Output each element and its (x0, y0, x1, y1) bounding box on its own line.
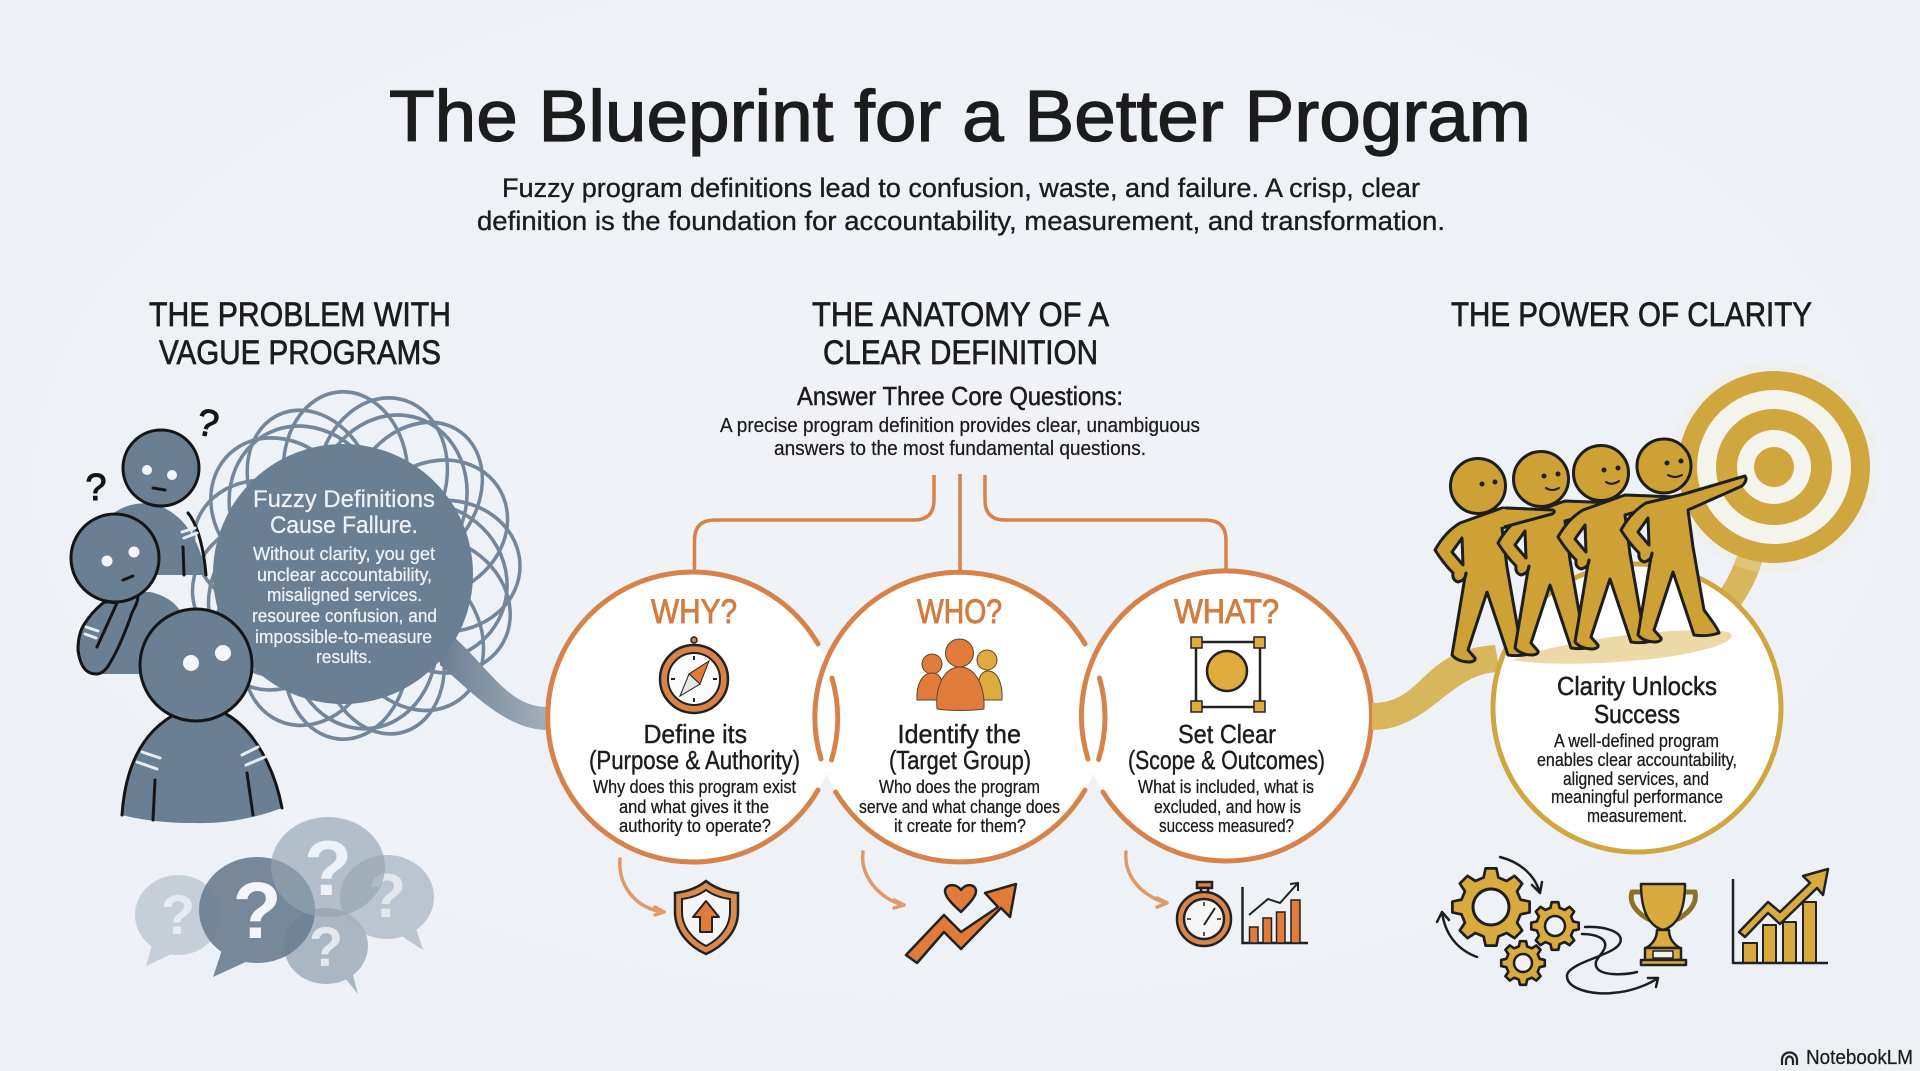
heading: anatomy (812, 296, 1109, 372)
callout: fuzzy definitions: misaligned services. (267, 585, 422, 605)
callout: fuzzy definitions: Without clarity, you get (253, 544, 435, 564)
card: clarity unlocks success: enables clear accountability, (1537, 749, 1737, 770)
callout: fuzzy definitions (213, 444, 473, 704)
icon: person, thinking: ? (85, 467, 107, 509)
icon: question speech bubbles: ? (233, 866, 281, 955)
icon: person, thinking (71, 467, 182, 674)
icon: trophy (1631, 884, 1695, 965)
card: why: Why does this program exist (593, 776, 796, 797)
card: clarity unlocks success: measurement. (1587, 805, 1687, 826)
card: what: excluded, and how is (1154, 796, 1301, 817)
card: clarity unlocks success: Success (1594, 699, 1680, 729)
card: why: WHY? (651, 593, 737, 631)
connector lines (694, 474, 1226, 570)
heading: anatomy: CLEAR DEFINITION (823, 334, 1098, 372)
icon: person, back: ? (193, 401, 222, 447)
card: what: (Scope & Outcomes) (1128, 745, 1325, 775)
subtitle (477, 173, 1445, 236)
callout: fuzzy definitions: Cause Fallure. (270, 512, 418, 539)
grey connector to definition (440, 625, 548, 730)
card: who: (Target Group) (889, 745, 1031, 775)
card: why: (Purpose & Authority) (589, 745, 800, 775)
subtitle: Fuzzy program definitions lead to confusion, waste, and failure. A crisp, clear (502, 173, 1420, 203)
icon: team pointing at target (1435, 439, 1746, 662)
card: why: authority to operate? (619, 815, 771, 836)
card: who: serve and what change does (859, 796, 1060, 817)
icon: question speech bubbles: ? (304, 824, 352, 912)
callout: fuzzy definitions: resouree confusion, and (252, 606, 437, 626)
card: what: WHAT? (1174, 593, 1279, 631)
icon: stopwatch (1177, 882, 1231, 946)
icon: person, front (122, 609, 282, 823)
callout: fuzzy definitions: results. (316, 647, 372, 667)
icon: target (1668, 361, 1880, 573)
watermark: NotebookLM: NotebookLM (1806, 1047, 1913, 1069)
panel: the anatomy of a clear definition (548, 296, 1372, 963)
icon: person, back (115, 401, 222, 575)
card: who: it create for them? (894, 815, 1026, 836)
icon: shield (675, 881, 738, 954)
card: who: WHO? (917, 593, 1002, 631)
card: clarity unlocks success: A well-defined program (1554, 730, 1719, 751)
intro text: Answer Three Core Questions: (797, 381, 1123, 411)
card: what: success measured? (1159, 815, 1294, 836)
panel: the problem with vague programs (71, 296, 548, 994)
card: why: Define its (644, 719, 747, 749)
card: what (1081, 571, 1371, 861)
card: clarity unlocks success: meaningful performance (1551, 786, 1723, 807)
icon: compass (660, 637, 728, 713)
card: clarity unlocks success: aligned services, and (1563, 768, 1709, 789)
card: who: Who does the program (879, 776, 1040, 797)
icon: heart and growth arrow (906, 884, 1016, 963)
heading: problem: THE PROBLEM WITH (149, 296, 451, 334)
callout: fuzzy definitions: unclear accountability, (257, 565, 432, 585)
intro text: A precise program definition provides clear, unambiguous (720, 415, 1200, 437)
icon: question speech bubbles: ? (161, 883, 195, 946)
icon: gears (1452, 868, 1579, 985)
card: why: and what gives it the (619, 796, 769, 817)
heading: power of clarity: THE POWER OF CLARITY (1451, 296, 1812, 334)
intro text: answers to the most fundamental questions. (774, 438, 1146, 460)
icon: question speech bubbles (135, 817, 434, 994)
card: what: Set Clear (1178, 719, 1276, 749)
icon: growth chart (1733, 869, 1828, 963)
icon: scope frame (1191, 637, 1265, 712)
arrow: what to metrics (1126, 852, 1167, 907)
arrow: who to growth (863, 852, 904, 908)
target stem (1716, 556, 1762, 610)
tangled scribble (181, 380, 531, 751)
icon: group of people (917, 639, 1002, 710)
subtitle: definition is the foundation for accountability, measurement, and transformation. (477, 206, 1445, 236)
title: The Blueprint for a Better Program (389, 77, 1531, 157)
callout: fuzzy definitions: impossible-to-measure (255, 627, 432, 647)
heading: anatomy: THE ANATOMY OF A (812, 296, 1109, 334)
card: who (815, 572, 1105, 862)
circle fills (548, 572, 1372, 862)
arrows: process flow (1437, 857, 1658, 993)
icon: bar chart (1242, 883, 1308, 943)
heading: problem (149, 296, 451, 372)
card: who: Identify the (898, 719, 1021, 749)
panel: the power of clarity (1372, 296, 1880, 993)
card: why (548, 572, 838, 862)
heading: problem: VAGUE PROGRAMS (159, 334, 441, 372)
card: what: What is included, what is (1138, 776, 1314, 797)
arrow: why to shield (620, 859, 664, 915)
card: clarity unlocks success (1493, 564, 1781, 852)
intro text (720, 381, 1200, 460)
callout: fuzzy definitions: Fuzzy Definitions (253, 486, 435, 513)
card: clarity unlocks success: Clarity Unlocks (1557, 671, 1717, 701)
icon: question speech bubbles: ? (309, 915, 343, 978)
gold connector from definition (1372, 645, 1500, 730)
icon: question speech bubbles: ? (368, 862, 406, 931)
